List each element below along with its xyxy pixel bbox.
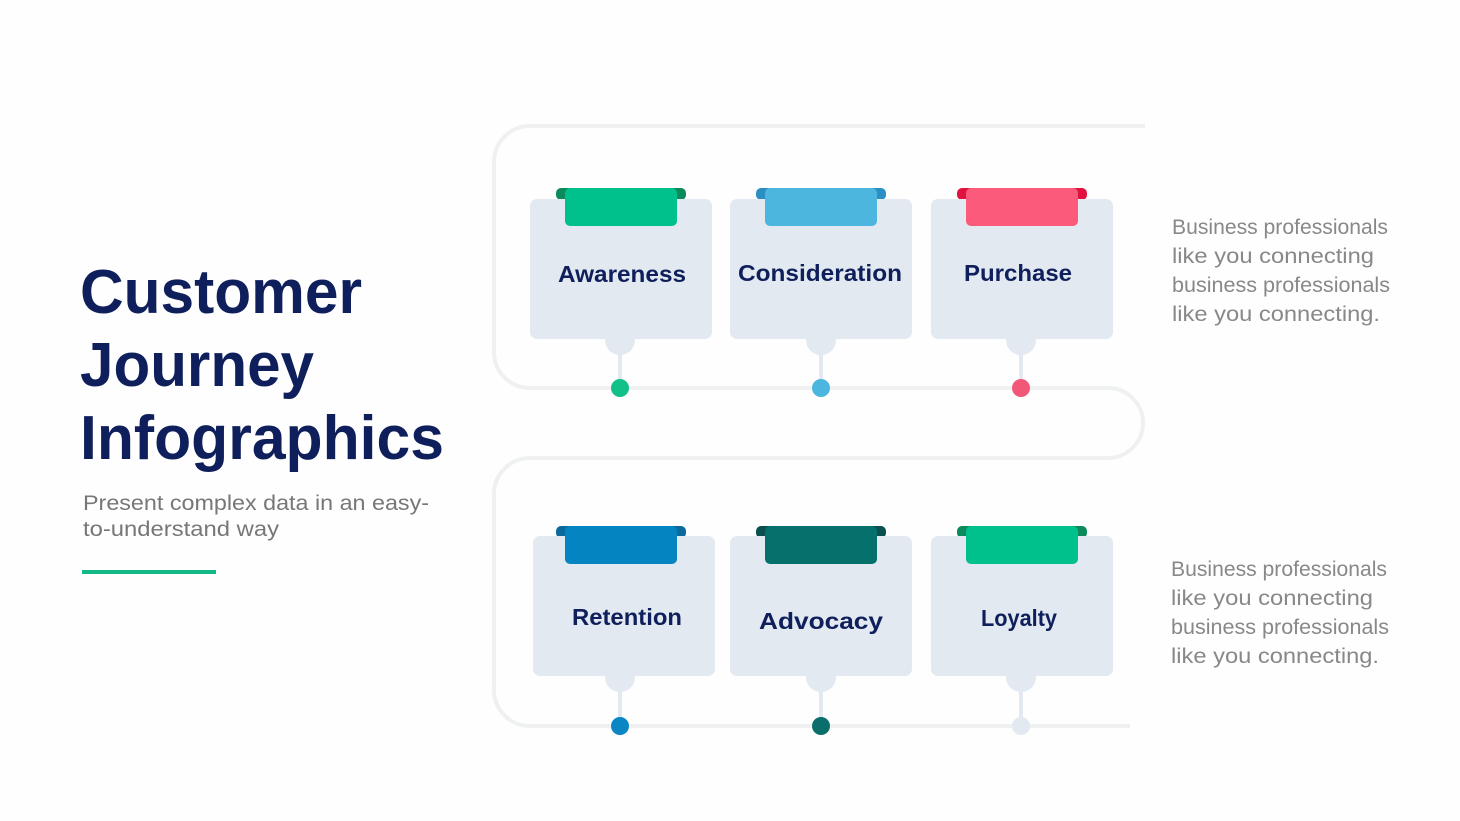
- subtitle: Present complex data in an easy-: [83, 492, 429, 515]
- title: [80, 258, 444, 473]
- card: Loyalty: Loyalty: [981, 605, 1057, 631]
- title: Customer: [80, 258, 362, 327]
- card: Advocacy: [730, 526, 912, 735]
- text block: top description: business professionals: [1172, 274, 1390, 297]
- card: Advocacy: Advocacy: [759, 608, 883, 634]
- card: Loyalty: [931, 526, 1113, 735]
- card: Retention: Retention: [572, 604, 682, 630]
- text block: top description: like you connecting.: [1172, 303, 1380, 326]
- card: Awareness: [530, 188, 712, 397]
- text block: top description: Business professionals: [1172, 216, 1388, 239]
- text block: top description: like you connecting: [1172, 245, 1374, 268]
- card: Consideration: [730, 188, 912, 397]
- card: Purchase: [931, 188, 1113, 397]
- text block: bottom description: business professionals: [1171, 616, 1389, 639]
- text block: bottom description: Business professionals: [1171, 558, 1387, 581]
- title: Infographics: [80, 404, 444, 473]
- journey path: [494, 126, 1145, 726]
- card: Consideration: Consideration: [738, 260, 902, 286]
- text block: bottom description: like you connecting: [1171, 587, 1373, 610]
- card: Awareness: Awareness: [558, 261, 686, 287]
- subtitle: [83, 492, 429, 541]
- subtitle: to-understand way: [83, 518, 280, 541]
- card: Retention: [533, 526, 715, 735]
- text block: bottom description: [1171, 558, 1389, 668]
- text block: bottom description: like you connecting.: [1171, 645, 1379, 668]
- title: Journey: [80, 331, 314, 400]
- card: Purchase: Purchase: [964, 260, 1072, 286]
- text block: top description: [1172, 216, 1390, 326]
- accent underline: [82, 570, 216, 574]
